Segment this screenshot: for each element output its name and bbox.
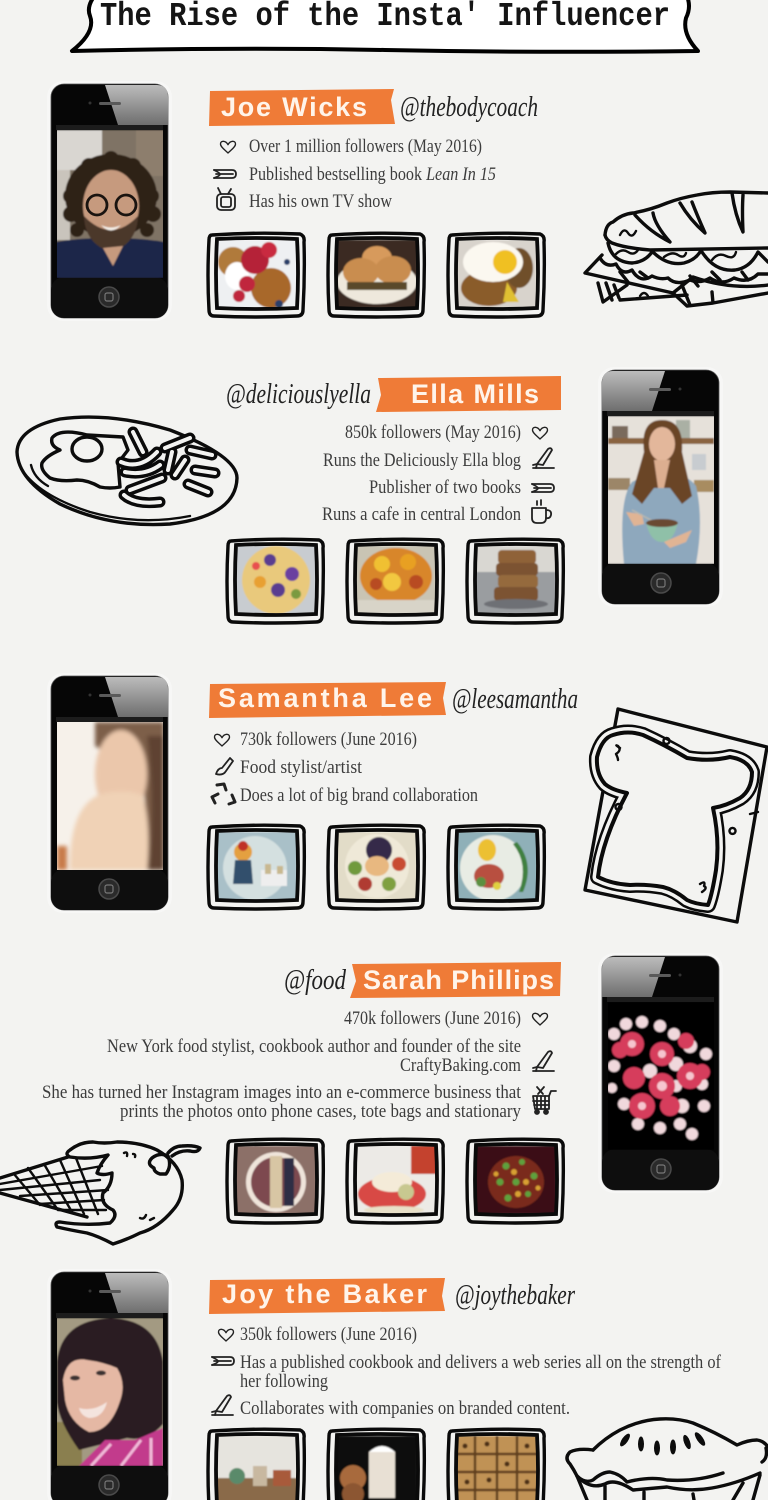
photo: orange vegetable dish xyxy=(347,539,443,623)
branded content fact: Collaborates with companies on branded content. xyxy=(240,1398,570,1419)
photo: floral pancake xyxy=(227,539,323,623)
photo: table with dishes xyxy=(208,1429,304,1500)
title banner xyxy=(72,0,698,52)
collaboration fact: Does a lot of big brand collaboration xyxy=(240,785,478,806)
phone: Ella Mills portrait xyxy=(598,367,723,607)
photo: egg on hash xyxy=(448,233,544,317)
doodle: sandwich xyxy=(585,192,768,306)
doodle: ice cream cone xyxy=(0,1142,200,1244)
section: Joy the Baker xyxy=(47,1269,768,1500)
book fact: Published bestselling book Lean In 15 xyxy=(249,164,496,185)
photo: dark salad xyxy=(467,1139,563,1223)
name label: Ella Mills xyxy=(376,376,561,412)
cookbook fact: her following xyxy=(240,1371,328,1392)
handle: food: @food xyxy=(284,964,346,996)
phone: Joe Wicks selfie xyxy=(47,81,172,321)
doodle: slice of toast xyxy=(585,709,767,922)
e-commerce fact: prints the photos onto phone cases, tote bags and stationary xyxy=(120,1101,521,1122)
name label: Ella Mills: Ella Mills xyxy=(411,379,539,409)
icon: heart xyxy=(218,1329,234,1341)
followers fact: 850k followers (May 2016) xyxy=(345,422,521,443)
icon: television xyxy=(217,188,235,210)
photo: pancakes with raspberries xyxy=(208,233,304,317)
photo: acai bowl xyxy=(227,1139,323,1223)
cookbook fact xyxy=(240,1352,722,1392)
e-commerce fact: She has turned her Instagram images into an e-commerce business that xyxy=(42,1082,522,1103)
stylist fact: Food stylist/artist xyxy=(240,757,363,778)
name label: Samantha Lee: Samantha Lee xyxy=(218,683,432,713)
followers fact: 730k followers (June 2016) xyxy=(240,729,417,750)
photo: milkshakes and cookies xyxy=(328,1429,424,1500)
stylist and author fact: CraftyBaking.com xyxy=(400,1055,521,1076)
phone: Sarah Phillips radish image xyxy=(598,953,723,1193)
cafe fact: Runs a cafe in central London xyxy=(322,504,521,525)
section: Samantha Lee xyxy=(47,673,767,922)
icon: pen xyxy=(212,1395,233,1415)
icon: coffee cup xyxy=(532,500,551,523)
followers fact: 350k followers (June 2016) xyxy=(240,1324,417,1345)
handle: joythebaker: @joythebaker xyxy=(455,1279,576,1311)
icon: pen xyxy=(533,448,554,468)
followers fact: 470k followers (June 2016) xyxy=(344,1008,521,1029)
photo: cartoon plate xyxy=(208,825,304,909)
photo: strawberry toast xyxy=(347,1139,443,1223)
phone: Samantha Lee selfie xyxy=(47,673,172,913)
doodle: fried egg and fries plate xyxy=(17,417,237,525)
handle: leesamantha: @leesamantha xyxy=(452,683,578,715)
name label: Sarah Phillips: Sarah Phillips xyxy=(363,965,554,995)
handle: thebodycoach: @thebodycoach xyxy=(400,91,538,123)
doodle: pie xyxy=(567,1419,768,1500)
icon: shopping cart xyxy=(533,1087,556,1114)
icon: brush xyxy=(216,758,233,775)
name label: Joe Wicks xyxy=(209,89,395,126)
icon: book xyxy=(532,484,554,492)
handle: deliciouslyella: @deliciouslyella xyxy=(226,378,371,410)
photo: yellow figure with greens xyxy=(448,825,544,909)
stylist and author fact: New York food stylist, cookbook author and founder of the site xyxy=(107,1036,521,1057)
photo: brownie squares xyxy=(448,1429,544,1500)
TV fact: Has his own TV show xyxy=(249,191,392,212)
blog fact: Runs the Deliciously Ella blog xyxy=(323,450,521,471)
icon: book xyxy=(212,1357,234,1365)
books fact: Publisher of two books xyxy=(369,477,521,498)
icon: pen xyxy=(533,1051,554,1071)
icon: heart xyxy=(220,141,236,153)
section: Ella Mills xyxy=(17,367,723,623)
e-commerce fact xyxy=(42,1082,522,1122)
photo: stacked bars xyxy=(467,539,563,623)
icon: recycle arrows xyxy=(212,784,235,804)
icon: heart xyxy=(532,427,548,439)
section: Joe Wicks xyxy=(47,81,768,321)
name label: Joy the Baker: Joy the Baker xyxy=(222,1279,427,1309)
photo: sliders on plate xyxy=(328,233,424,317)
stylist and author fact xyxy=(107,1036,521,1076)
photo: face plate with greens xyxy=(328,825,424,909)
section: Sarah Phillips xyxy=(0,953,723,1244)
icon: heart xyxy=(214,734,230,746)
name label: Joe Wicks: Joe Wicks xyxy=(221,92,367,122)
phone: Joy the Baker selfie xyxy=(47,1269,172,1500)
icon: heart xyxy=(532,1013,548,1025)
followers fact: Over 1 million followers (May 2016) xyxy=(249,136,482,157)
icon: book xyxy=(214,170,236,178)
